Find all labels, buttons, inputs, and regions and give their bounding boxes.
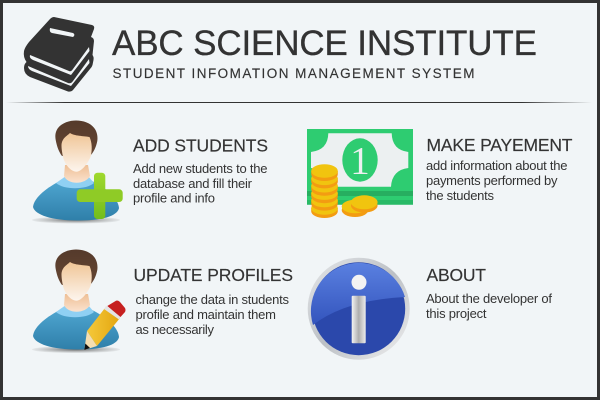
- description: add students: database and fill their: [133, 176, 253, 191]
- panel: make payment: [307, 129, 573, 218]
- banknote numeral: 1: [350, 139, 370, 182]
- description: update profiles: [136, 292, 290, 337]
- coin stack: [311, 164, 338, 218]
- icon: student with plus: [32, 120, 123, 224]
- description: make payement: payments performed by: [426, 173, 558, 188]
- subtitle: STUDENT INFOMATION MANAGEMENT SYSTEM: [112, 66, 475, 81]
- heading: make payement: MAKE PAYEMENT: [426, 135, 573, 155]
- heading: about: ABOUT: [426, 265, 486, 285]
- panel: about: [308, 258, 552, 360]
- description: about: [426, 291, 552, 321]
- description: make payement: [426, 158, 568, 203]
- title: ABC SCIENCE INSTITUTE: [112, 24, 537, 63]
- description: add students: Add new students to the: [133, 161, 268, 176]
- description: about: About the developer of: [426, 291, 552, 306]
- heading: add students: ADD STUDENTS: [133, 136, 268, 156]
- description: update profiles: profile and maintain them: [136, 307, 276, 322]
- icon: information sign: [308, 258, 410, 360]
- icon: stacked books: [24, 17, 94, 92]
- description: make payement: the students: [426, 188, 494, 203]
- panel: add students: [32, 120, 268, 224]
- icon: student with pencil: [32, 250, 126, 353]
- description: update profiles: as necessarily: [136, 322, 214, 337]
- description: about: this project: [426, 306, 487, 321]
- description: update profiles: change the data in students: [136, 292, 290, 307]
- icon: banknote and coins: [307, 129, 413, 218]
- heading: update profiles: UPDATE PROFILES: [134, 265, 293, 285]
- description: add students: [133, 161, 268, 206]
- description: add students: profile and info: [133, 190, 215, 206]
- panel: update profiles: [32, 250, 293, 353]
- description: make payement: add information about the: [426, 158, 568, 173]
